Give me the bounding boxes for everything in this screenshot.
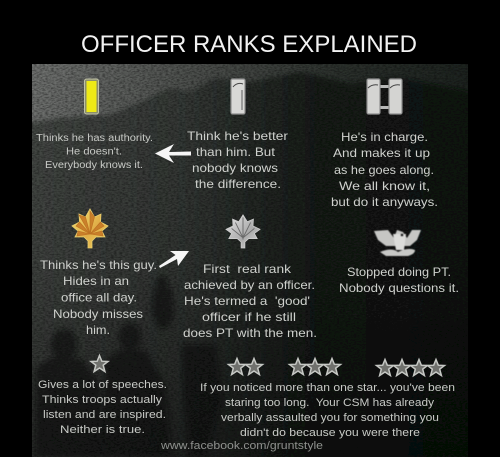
text: first lieutenant: nobody knows [192, 161, 278, 175]
text: first lieutenant: the difference. [195, 177, 281, 191]
text: colonel [339, 265, 459, 295]
text: first lieutenant: than him. But [196, 145, 276, 159]
text: first lieutenant [187, 129, 288, 191]
text: brigadier general [38, 379, 167, 436]
text: brigadier general: listen and are inspired. [43, 409, 166, 421]
icon: double silver bars [367, 79, 402, 114]
title: OFFICER RANKS EXPLAINED [81, 31, 417, 58]
icon: one star [91, 356, 108, 372]
text: captain [331, 130, 438, 209]
text: generals: verbally assaulted you for something you [221, 412, 439, 424]
text: captain: He's in charge. [341, 130, 428, 144]
text: generals [200, 382, 455, 439]
text: brigadier general: Gives a lot of speeches. [38, 379, 167, 391]
icon: silver bar [231, 79, 245, 114]
text: second lieutenant: Thinks he has authority. [36, 133, 153, 144]
text: generals: If you noticed more than one star... you've been [200, 382, 455, 394]
text: major [40, 258, 157, 337]
text: generals: didn't do because you were there [240, 427, 420, 439]
text: captain: as he goes along. [334, 163, 434, 177]
text: colonel: Stopped doing PT. [347, 265, 451, 279]
text: major: Thinks he's this guy. [40, 258, 157, 272]
arrow: pointing up-right [159, 251, 189, 268]
text: lieutenant colonel: does PT with the men. [183, 326, 317, 340]
text: second lieutenant [36, 133, 153, 171]
text: lieutenant colonel: He's termed a 'good' [184, 294, 310, 308]
text: captain: We all know it, [339, 179, 430, 193]
text: brigadier general: Neither is true. [60, 424, 145, 436]
text: major: him. [86, 323, 110, 337]
text: captain: And makes it up [333, 146, 430, 160]
text: second lieutenant: Everybody knows it. [45, 160, 143, 171]
text: second lieutenant: He doesn't. [66, 146, 122, 158]
icon: gold oak leaf [72, 209, 108, 248]
text: generals: staring too long. Your CSM has already [225, 397, 435, 409]
text: captain: but do it anyways. [331, 195, 438, 209]
source url: www.facebook.com/gruntstyle [160, 440, 323, 452]
text: lieutenant colonel: First real rank [203, 262, 292, 276]
text: major: Nobody misses [53, 307, 143, 321]
icon: three stars [290, 358, 340, 374]
icon: four stars [376, 360, 444, 376]
text: colonel: Nobody questions it. [339, 281, 459, 295]
text: major: office all day. [61, 290, 137, 304]
text: first lieutenant: Think he's better [187, 129, 288, 143]
icon: two stars [228, 358, 262, 374]
icon: gold bar [84, 79, 98, 114]
text: brigadier general: Thinks troops actually [42, 394, 163, 406]
text: lieutenant colonel [183, 262, 317, 340]
text: lieutenant colonel: achieved by an officer. [184, 278, 315, 292]
arrow: pointing left [155, 144, 191, 163]
text: major: Hides in an [63, 274, 129, 288]
text: lieutenant colonel: officer if he still [202, 310, 296, 324]
icon: silver eagle [374, 230, 421, 256]
icon: silver oak leaf [226, 215, 260, 248]
